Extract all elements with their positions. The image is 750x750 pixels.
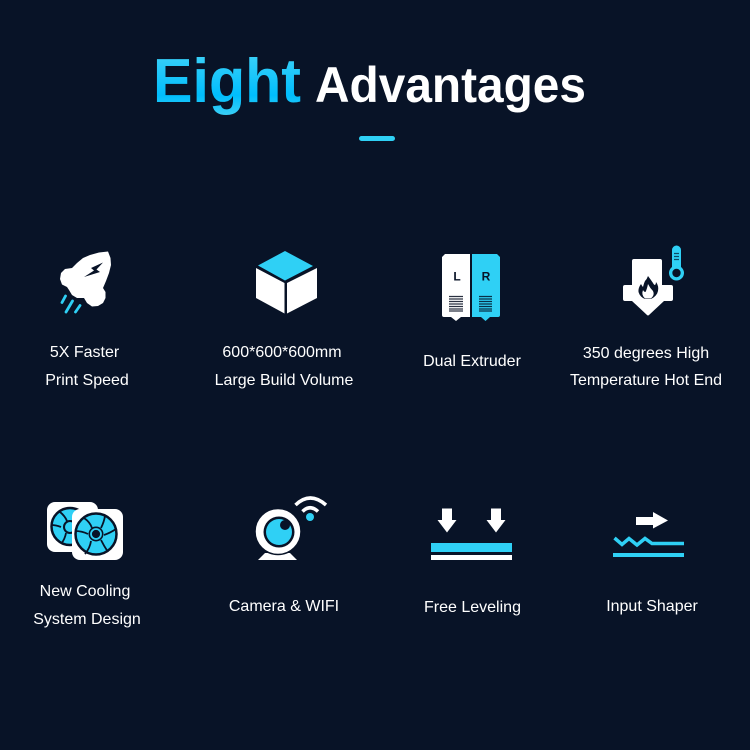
item: free leveling xyxy=(424,508,521,616)
icon: leveling xyxy=(431,508,512,560)
label: 350 degrees High xyxy=(583,345,709,362)
label: System Design xyxy=(33,611,141,628)
label xyxy=(45,344,129,389)
label: Input Shaper xyxy=(606,598,698,615)
item: print speed xyxy=(45,252,129,389)
label: Temperature Hot End xyxy=(570,372,722,389)
item: input shaper xyxy=(606,512,698,615)
icon: shaper xyxy=(613,512,684,557)
label xyxy=(570,345,722,389)
icon: extruder: L xyxy=(453,270,461,284)
title xyxy=(153,47,586,116)
item: dual extruder xyxy=(423,254,522,370)
item: build volume xyxy=(215,251,353,389)
item: hot end xyxy=(570,246,722,389)
label: Print Speed xyxy=(45,372,129,389)
icon: webcam and wifi xyxy=(255,498,326,560)
label: 600*600*600mm xyxy=(222,344,342,361)
label: Camera & WIFI xyxy=(229,598,339,615)
icon: rocket xyxy=(60,252,111,312)
label xyxy=(215,344,353,389)
label: Large Build Volume xyxy=(215,372,353,389)
label: 5X Faster xyxy=(50,344,120,361)
icon: extruder: R xyxy=(482,270,491,284)
icon: fans xyxy=(47,502,123,560)
item: camera xyxy=(229,498,339,615)
icon: extruder xyxy=(442,254,500,321)
label xyxy=(33,583,141,628)
icon: cube xyxy=(256,251,317,314)
label: New Cooling xyxy=(40,583,130,600)
title: Eight xyxy=(153,47,301,116)
label: Dual Extruder xyxy=(423,353,522,370)
item: cooling xyxy=(33,502,141,628)
icon: hot end xyxy=(623,246,684,316)
title: Advantages xyxy=(315,57,586,113)
label: Free Leveling xyxy=(424,599,521,616)
title accent bar xyxy=(359,136,395,141)
